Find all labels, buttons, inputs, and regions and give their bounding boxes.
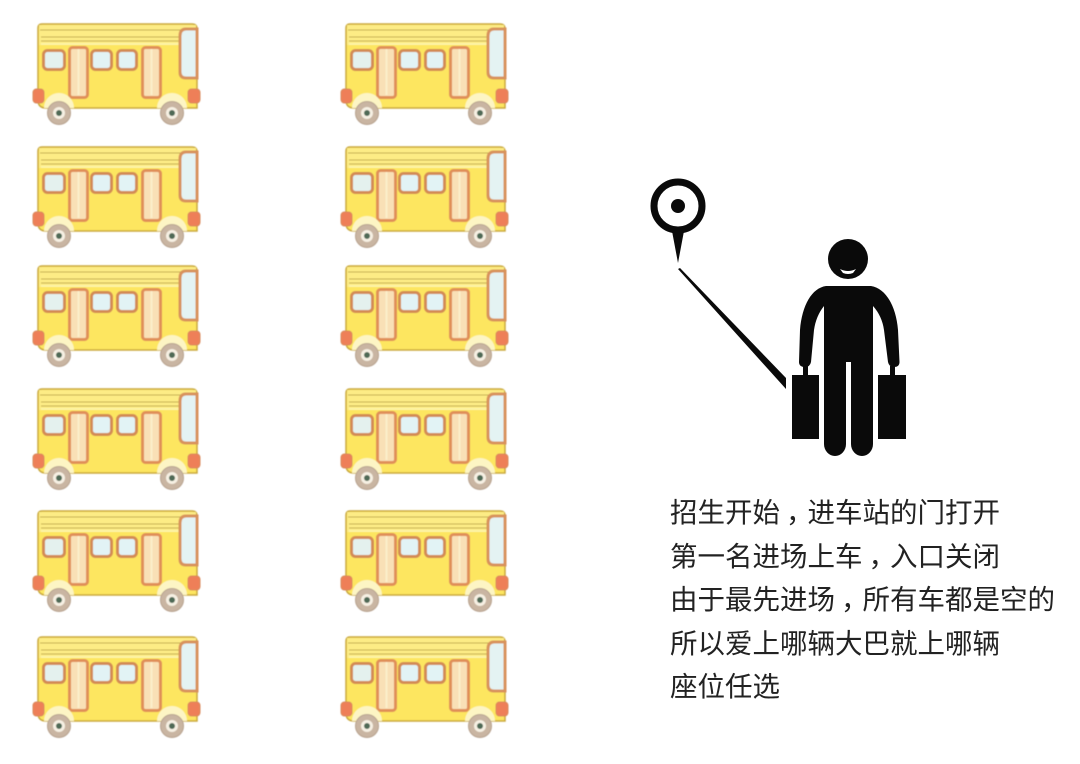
bus column right, row 2 — [341, 147, 508, 248]
arrow line from pin to traveller — [678, 268, 786, 389]
bus column right, row 6 — [341, 637, 508, 738]
bus column left, row 6 — [33, 637, 200, 738]
text line 1: 招生开始，进车站的门打开 — [670, 497, 1000, 528]
bus column left, row 1 — [33, 24, 200, 124]
bus column right, row 4 — [341, 389, 508, 490]
text block: explanation — [670, 497, 1055, 702]
bus column left, row 4 — [33, 389, 200, 490]
bus column right, row 3 — [341, 266, 508, 366]
bus column right, row 5 — [341, 511, 508, 612]
bus column left, row 3 — [33, 266, 200, 366]
icon: location pin — [654, 182, 702, 263]
bus column left, row 5 — [33, 511, 200, 612]
text line 3: 由于最先进场，所有车都是空的 — [670, 584, 1055, 615]
bus column left, row 2 — [33, 147, 200, 248]
text line 4: 所以爱上哪辆大巴就上哪辆 — [670, 628, 1000, 659]
icon: traveller with two suitcases — [792, 239, 906, 456]
text line 2: 第一名进场上车，入口关闭 — [670, 541, 1000, 572]
text line 5: 座位任选 — [670, 671, 780, 702]
bus column right, row 1 — [341, 24, 508, 124]
